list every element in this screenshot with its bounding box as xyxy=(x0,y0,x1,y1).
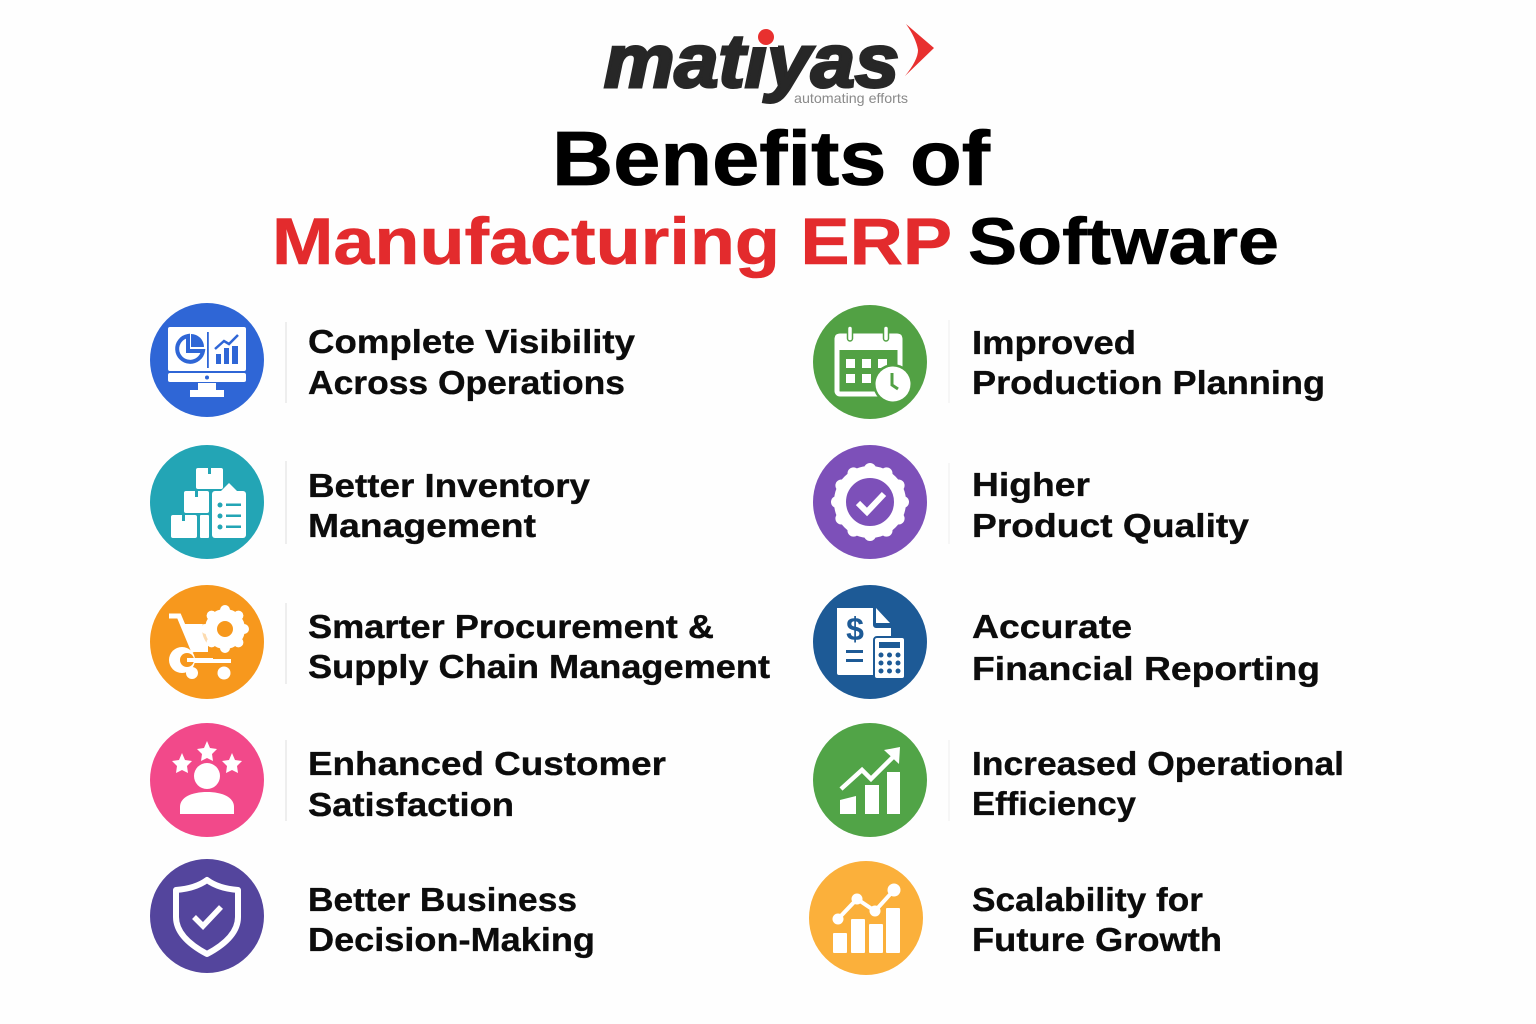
benefit: Better Business Decision-Making: Better Business xyxy=(308,881,577,918)
icon: cart with gear xyxy=(150,585,264,699)
title: Benefits of xyxy=(552,116,990,202)
benefit: Enhanced Customer Satisfaction: Enhanced Customer xyxy=(308,745,666,782)
icon: quality badge xyxy=(813,445,927,559)
benefit: Enhanced Customer Satisfaction xyxy=(150,723,666,837)
benefit: Complete Visibility Across Operations: Complete Visibility xyxy=(308,323,636,360)
icon: invoice and calculator: $ xyxy=(846,611,864,647)
benefit: Smarter Procurement & Supply Chain Management: Supply Chain Management xyxy=(308,648,770,685)
benefit: Better Inventory Management: Better Inventory xyxy=(308,467,591,504)
icon: bars with trend line xyxy=(809,861,923,975)
benefit: Higher Product Quality xyxy=(813,445,1250,559)
icon: customer with stars xyxy=(150,723,264,837)
logo: matiyas: matiyas xyxy=(604,19,899,103)
benefit: Smarter Procurement & Supply Chain Management: Smarter Procurement & xyxy=(308,608,714,645)
icon: invoice and calculator xyxy=(813,585,927,699)
benefit: Smarter Procurement & Supply Chain Management xyxy=(150,585,770,699)
benefit: Improved Production Planning xyxy=(813,305,1325,419)
benefit: Increased Operational Efficiency: Efficiency xyxy=(972,785,1137,822)
icon: growth chart arrow xyxy=(813,723,927,837)
benefit: Better Inventory Management xyxy=(150,445,591,559)
benefit: Complete Visibility Across Operations: Across Operations xyxy=(308,364,625,401)
benefit: Accurate Financial Reporting: Financial Reporting xyxy=(972,650,1320,687)
benefit: Scalability for Future Growth xyxy=(809,861,1222,975)
benefit: Scalability for Future Growth: Future Growth xyxy=(972,921,1222,958)
benefit: Better Business Decision-Making xyxy=(150,859,595,973)
benefit: Improved Production Planning: Improved xyxy=(972,324,1136,361)
benefit: Higher Product Quality: Higher xyxy=(972,466,1090,503)
title xyxy=(272,116,1279,278)
icon: monitor dashboard xyxy=(150,303,264,417)
benefit: Complete Visibility Across Operations xyxy=(150,303,636,417)
benefit: Better Business Decision-Making: Decision-Making xyxy=(308,921,595,958)
title: Manufacturing ERP xyxy=(272,204,952,278)
benefit: Accurate Financial Reporting xyxy=(813,585,1320,699)
icon: boxes and checklist xyxy=(150,445,264,559)
icon: shield with check xyxy=(150,859,264,973)
icon: calendar with clock xyxy=(813,305,927,419)
benefit: Accurate Financial Reporting: Accurate xyxy=(972,608,1132,645)
benefit: Increased Operational Efficiency: Increased Operational xyxy=(972,745,1344,782)
benefit: Enhanced Customer Satisfaction: Satisfaction xyxy=(308,786,514,823)
benefit: Increased Operational Efficiency xyxy=(813,723,1344,837)
logo: matiyas: automating efforts xyxy=(794,90,908,106)
benefit: Higher Product Quality: Product Quality xyxy=(972,507,1250,544)
benefit: Improved Production Planning: Production Planning xyxy=(972,364,1325,401)
title: Software xyxy=(968,204,1279,278)
benefit: Better Inventory Management: Management xyxy=(308,507,536,544)
benefit: Scalability for Future Growth: Scalability for xyxy=(972,881,1203,918)
